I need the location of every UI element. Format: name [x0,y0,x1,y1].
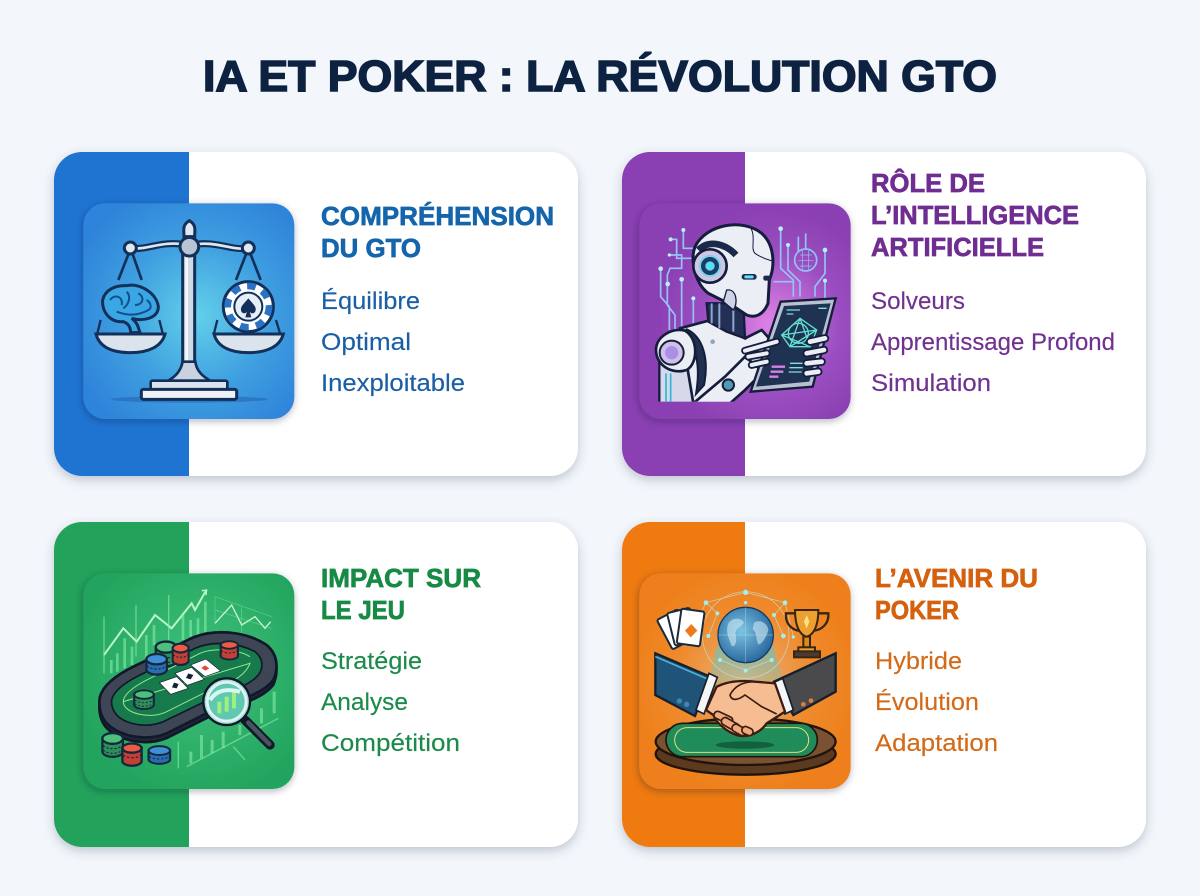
list: Hybride [875,648,962,675]
heading: DU GTO [321,233,421,263]
colour band [622,522,745,847]
panel: rôle de l'intelligence artificielle [622,152,1146,476]
list [321,288,465,397]
heading: L’INTELLIGENCE [871,200,1079,230]
heading [321,201,554,263]
heading: LE JEU [321,595,405,625]
colour band [622,152,745,476]
card background [54,152,578,476]
heading: IMPACT SUR [321,563,481,593]
panel: impact sur le jeu [54,522,578,847]
title: IA ET POKER : LA RÉVOLUTION GTO [203,51,997,101]
list: Solveurs [871,288,965,315]
card background [622,522,1146,847]
heading [875,563,1038,625]
heading [871,168,1079,262]
icon: handshake over poker table with globe and trophy [639,573,851,789]
list: Inexploitable [321,370,465,397]
list: Évolution [875,689,979,716]
heading: ARTIFICIELLE [871,232,1044,262]
list: Équilibre [321,288,420,315]
list: Analyse [321,689,408,716]
card background [54,522,578,847]
heading [321,563,481,625]
icon: robot reading a tablet [639,203,851,419]
panel: l'avenir du poker [622,522,1146,847]
heading: RÔLE DE [871,168,985,198]
heading: L’AVENIR DU [875,563,1038,593]
heading: COMPRÉHENSION [321,201,554,231]
list: Adaptation [875,730,998,757]
heading: POKER [875,595,959,625]
list: Optimal [321,329,411,356]
list [321,648,460,757]
list [875,648,998,757]
list: Stratégie [321,648,422,675]
list: Apprentissage Profond [871,329,1115,356]
list: Compétition [321,730,460,757]
card background [622,152,1146,476]
icon: scales balancing brain and poker chip [83,203,294,419]
colour band [54,152,189,476]
panel: compréhension du GTO [54,152,578,476]
colour band [54,522,189,847]
list [871,288,1115,397]
list: Simulation [871,370,991,397]
icon: poker table with charts and magnifying glass [83,573,294,789]
